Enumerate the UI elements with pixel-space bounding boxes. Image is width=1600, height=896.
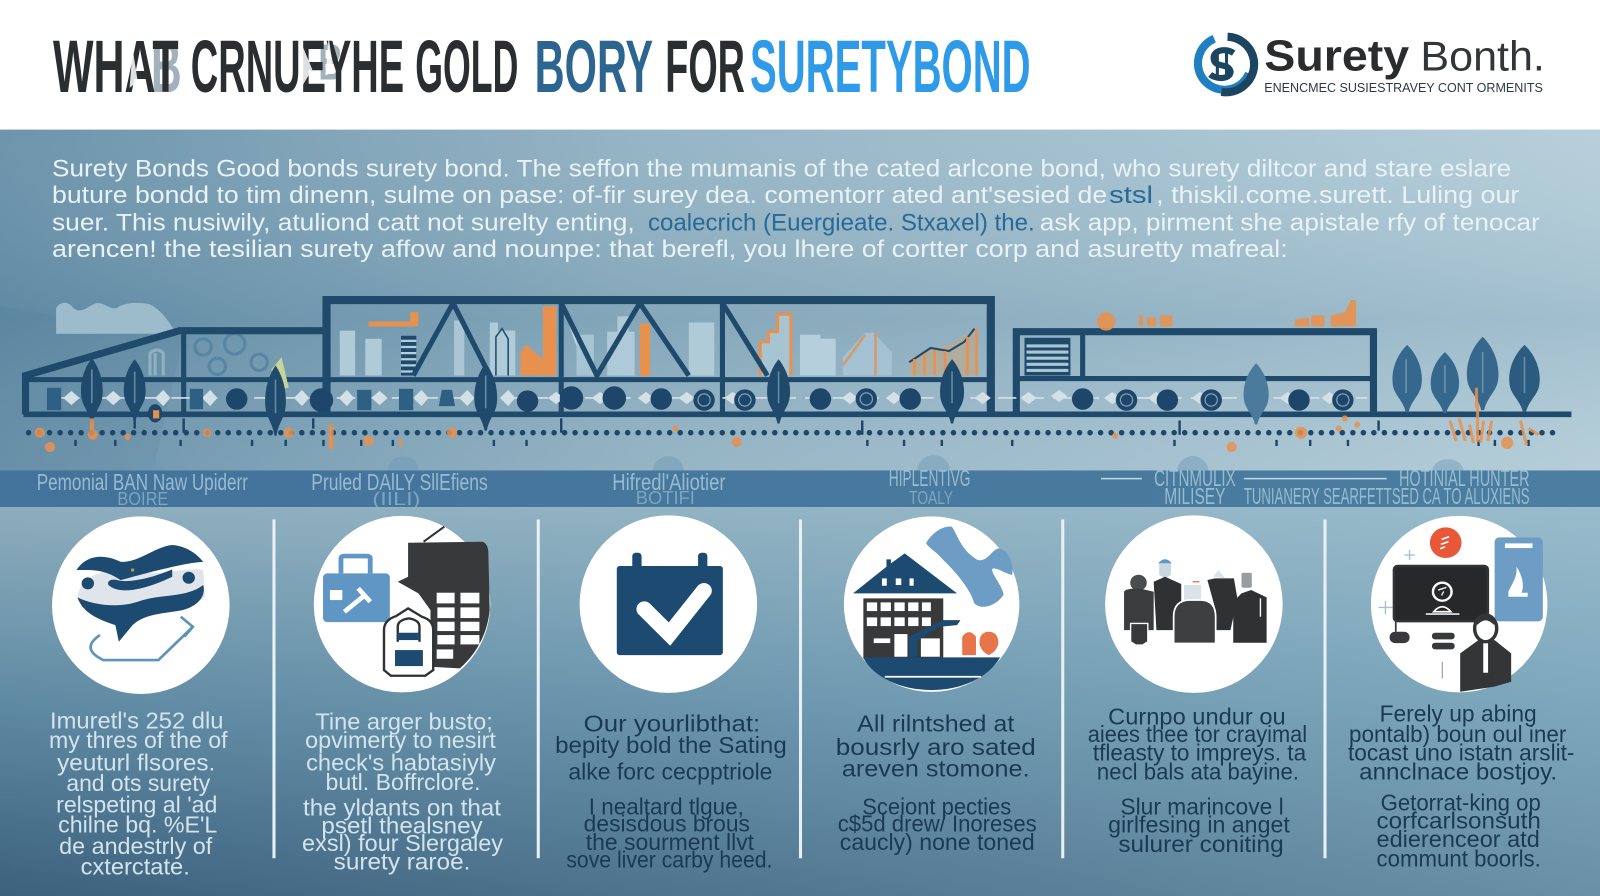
icon: group of people (1105, 515, 1283, 693)
panel 6 text: communt boorls. (1377, 845, 1541, 871)
panel 2 text: psetl thealsney (321, 813, 483, 839)
icon: house and tools (844, 516, 1019, 692)
panel 5 (1088, 515, 1307, 857)
upper band background (0, 130, 1600, 507)
city skyline (340, 306, 979, 376)
cloud (56, 303, 177, 334)
panel 1 text: my thres of the of (49, 727, 228, 753)
lower band background (0, 507, 1600, 896)
panel 4 text: caucly) none toned (840, 829, 1035, 855)
faint gear cluster (150, 334, 267, 376)
intro paragraph (52, 156, 1540, 263)
panel 4 text (836, 711, 1037, 855)
intro paragraph: buture bondd to tim dinenn, sulme on pase: of-fir surey dea. comentorr ated ant'sesied de (52, 182, 1107, 209)
logo wordmark: Surety (1264, 31, 1410, 80)
header background (0, 0, 1600, 130)
panel 2 text: exsl) four Slergaley (302, 830, 504, 856)
panel 3 text: bepity bold the Sating (555, 732, 787, 758)
panel 6 text: corfcarlsonsuth (1377, 808, 1541, 834)
gears and chain (47, 357, 1367, 422)
panel 2 (302, 516, 504, 874)
title: WHAT (53, 25, 179, 108)
panel 1 text: relspeting al 'ad (56, 791, 217, 817)
strip label 4: HIPLENTIVG (889, 465, 970, 491)
panel 3 text: Our yourlibthat: (584, 711, 760, 737)
strip label 2: Pruled DAlLY SllEfiens (311, 469, 488, 495)
panel 3 text: the sourment llvt (586, 829, 755, 855)
panel 6 text: Ferely up abing (1380, 700, 1537, 726)
intro paragraph: stsl (1109, 182, 1153, 209)
panel 1 text: Imuretl's 252 dlu (50, 708, 223, 734)
intro paragraph: suer. This nusiwily, atuliond catt not surelty enting, (52, 210, 635, 237)
panel 3 text: alke forc cecpptriole (568, 759, 772, 785)
title: SURETYBOND (750, 25, 1031, 108)
panel 1 text: de andestrly of (59, 833, 213, 859)
strip label 4: TOALY (909, 487, 953, 508)
panel 5 text: aiees thee tor crayimal (1088, 721, 1307, 747)
panel 2 text: opvimerty to nesirt (305, 727, 497, 753)
panel 5 text: tfleasty to impreys. ta (1093, 739, 1306, 765)
icon: calendar check (580, 515, 757, 693)
panel 2 text: check's habtasiyly (306, 749, 496, 775)
intro paragraph: , thiskil.come.surett. Luling our (1156, 182, 1519, 209)
logo tagline: ENENCMEC SUSIESTRAVEY CONT ORMENITS (1264, 80, 1543, 95)
intro paragraph: coalecrich (Euergieate. Stxaxel) the. (648, 210, 1035, 237)
panel 2 text (302, 709, 504, 874)
logo (1198, 31, 1545, 95)
panel 4 text: All rilntshed at (857, 711, 1015, 737)
intro paragraph: Surety Bonds Good bonds surety bond. The seffon the mumanis of the cated arlcone bond, who surety diltcor and stare eslare (52, 156, 1511, 183)
panel 5 text: Slur marincove l (1120, 793, 1284, 819)
bridge chart illustration (23, 300, 1571, 452)
logo mark (1198, 37, 1254, 92)
panel 4 text: c$5d drew/ Inoreses (838, 811, 1037, 837)
panel 4 text: areven stomone. (842, 756, 1030, 782)
rooftop orange bars (1097, 300, 1356, 331)
panel 5 text: girlfesing in anget (1108, 812, 1290, 838)
panel 6 text: Getorrat-king op (1381, 789, 1541, 815)
panel 2 text: Tine arger busto; (315, 709, 493, 735)
strip label 1 (37, 469, 248, 509)
panel 6 (1348, 516, 1574, 871)
logo: Bonth. (1420, 32, 1545, 79)
panel 3 text: desisdous brous (584, 811, 750, 837)
panel 5 text: necl bals ata bayine. (1097, 759, 1299, 785)
strip label 1: BOIRE (117, 488, 168, 509)
icon: handshake bond wave (52, 516, 230, 694)
panel 5 text: sulurer coniting (1118, 831, 1284, 857)
strip label 1: Pemonial BAN Naw Upiderr (37, 469, 248, 495)
title: CRNUEYHE (191, 25, 404, 108)
panel 4 text: bousrly aro sated (836, 734, 1036, 760)
strip label 3: Hifredl'Aliotier (612, 469, 726, 495)
panel 5 text: Curnpo undur ou (1108, 704, 1286, 730)
column dividers (272, 519, 1327, 858)
panel 4 (836, 516, 1037, 855)
dotted rail with ticks (29, 418, 1561, 446)
panel 1 text (49, 708, 228, 880)
title: FOR (665, 25, 745, 108)
strip label 4 (889, 465, 970, 508)
label strip (0, 465, 1600, 509)
bridge frame (23, 300, 1571, 414)
panel 6 text (1348, 700, 1574, 871)
panel 1 text: chilne bq. %E'L (58, 812, 217, 838)
panel 6 text: tocast uno istatn arslit- (1348, 739, 1574, 765)
panel 3 text (555, 711, 787, 872)
panel 1 (49, 516, 230, 880)
title: B (318, 34, 343, 91)
panel 6 text: annclnace bostjoy. (1359, 759, 1557, 785)
intro paragraph: ask app, pirment she apistale rfy of tenocar (1040, 210, 1540, 237)
tree pylons (81, 337, 1540, 436)
icon: briefcase, tag and keypad (314, 516, 490, 692)
panel 6 text: edierenceor atd (1377, 826, 1540, 852)
strip label 3: BOTIFI (636, 487, 695, 508)
strip label 5: MILISEY (1164, 483, 1226, 509)
panel 1 text: and ots surety (66, 770, 211, 796)
orange splatter (35, 388, 1539, 452)
title: B (151, 25, 182, 108)
panel 2 text: the yldants on that (303, 794, 502, 820)
intro paragraph: arencen! the tesilian surety affow and nounpe: that berefl, you lhere of cortter corp and asuretty mafreal: (52, 236, 1288, 263)
icon: monitor, phone and advisor (1371, 516, 1547, 692)
louver panel (1024, 338, 1070, 376)
panel 3 (555, 515, 787, 872)
panel 4 text: Sceiont pecties (862, 793, 1011, 819)
strip label 2 (311, 469, 488, 509)
strip label 3 (612, 469, 726, 508)
title: BORY (535, 25, 653, 108)
strip label 5 (1101, 465, 1387, 509)
strip label 5: CITNMULIX (1154, 465, 1236, 491)
title (53, 25, 1031, 108)
panel 2 text: butl. Boffrclore. (326, 769, 481, 795)
panel 1 text: yeuturl flsores. (57, 749, 215, 775)
panel 3 text: I nealtard tlgue, (589, 793, 744, 819)
panel 3 text: sove liver carby heed. (566, 846, 772, 872)
strip label 2: (IILI) (372, 488, 420, 509)
faint domes above label strip (133, 455, 1463, 470)
title: GOLD (415, 25, 518, 108)
panel 5 text (1088, 704, 1307, 857)
strip label 6 (1244, 465, 1530, 509)
panel 6 text: pontalb) boun oul iner (1349, 721, 1567, 747)
panel 2 text: surety raroe. (334, 848, 470, 874)
panel 1 text: cxterctate. (81, 854, 190, 880)
